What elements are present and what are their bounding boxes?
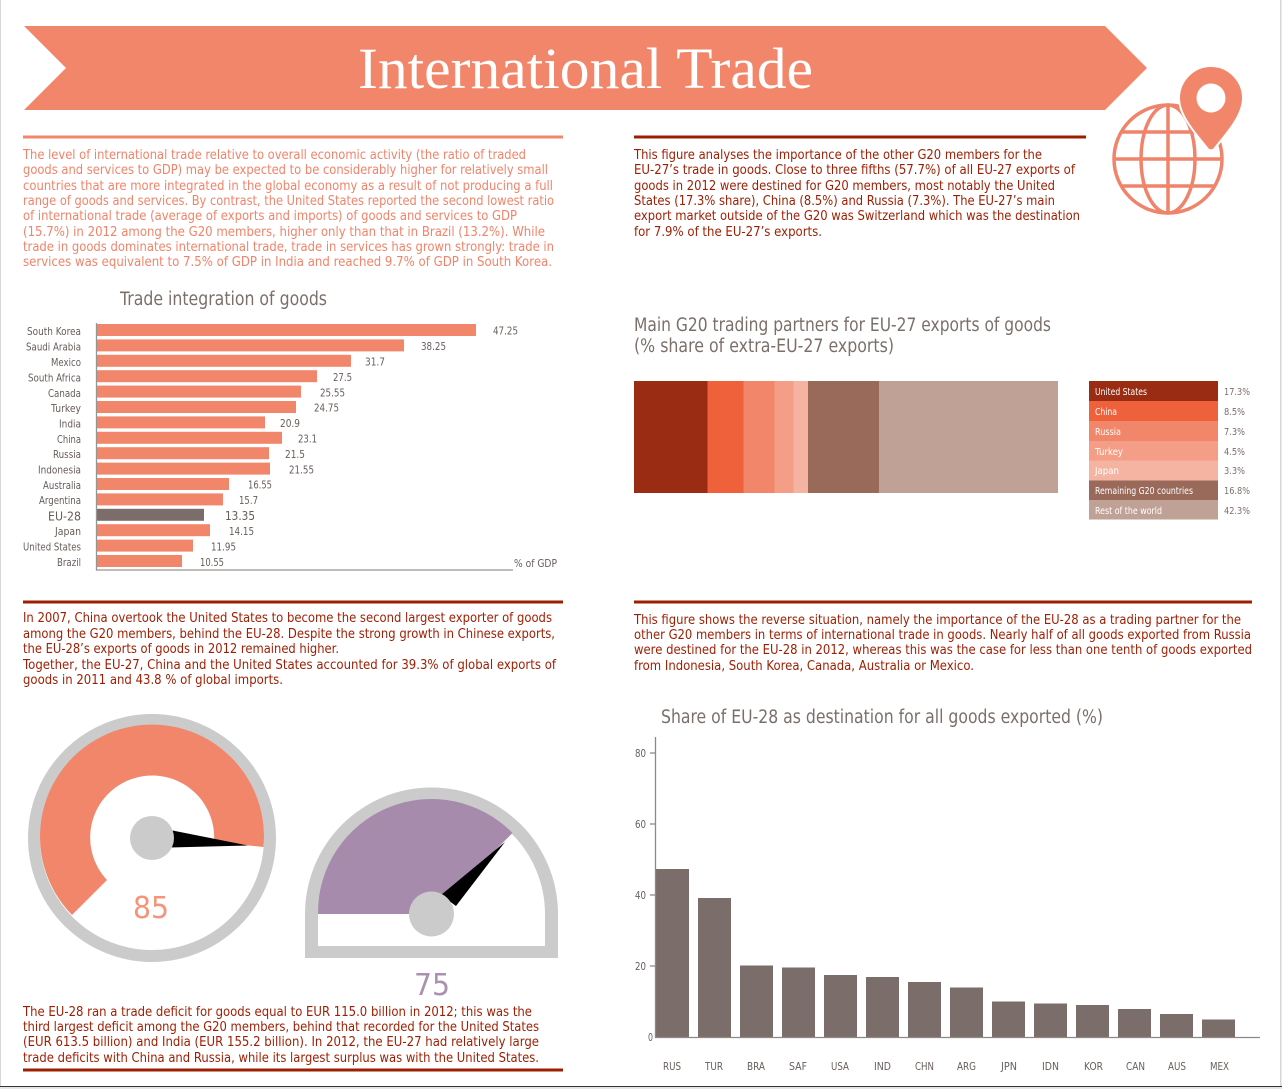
bar chart: trade integration of goods: 27.5 [333, 372, 352, 384]
text block: trade relative to economic activity: trade in goods dominates international trade, trade in services has grown strongly: trade in [23, 240, 554, 255]
text block: importance of G20 members: EU-27’s trade in goods. Close to three fifths (57.7%) of all EU-27 exports of [634, 163, 1075, 178]
legend: export shares: 17.3% [1224, 387, 1250, 398]
bar chart: trade integration of goods: 47.25 [493, 326, 518, 338]
bar chart: trade integration of goods: % of GDP [514, 558, 557, 570]
heading: main G20 trading partners: (% share of extra-EU-27 exports) [634, 336, 894, 357]
heading: main G20 trading partners [634, 315, 1051, 357]
gauge: 75 [305, 788, 558, 1003]
bar chart: trade integration of goods: Mexico [51, 357, 81, 369]
text block: importance of G20 members: for 7.9% of the EU-27’s exports. [634, 225, 822, 240]
legend: export shares: 16.8% [1224, 486, 1250, 497]
text block: trade relative to economic activity: (15.7%) in 2012 among the G20 members, higher only than that in Brazil (13.2%). While [23, 225, 545, 240]
bar chart: trade integration of goods: South Korea [27, 326, 81, 338]
text block: importance of G20 members: goods in 2012 were destined for G20 members, most notably the United [634, 179, 1055, 194]
text block: importance of G20 members: export market outside of the G20 was Switzerland which was the destination [634, 209, 1080, 224]
bar chart: share of EU-28 as destination: CAN [1126, 1061, 1145, 1073]
bar chart: share of EU-28 as destination: RUS [663, 1061, 681, 1073]
bar chart: share of EU-28 as destination: ARG [957, 1061, 976, 1073]
bar chart: share of EU-28 as destination: TUR [704, 1061, 723, 1073]
text block: trade relative to economic activity: The level of international trade relative to overall economic activity (the ratio of traded [22, 148, 526, 163]
text block: EU-28 trade deficit: (EUR 613.5 billion) and India (EUR 155.2 billion). In 2012, the EU-27 had relatively large [23, 1035, 539, 1050]
text block: China overtook the United States: the EU-28’s exports of goods in 2012 remained higher. [23, 642, 339, 657]
bar chart: trade integration of goods: Russia [53, 449, 81, 461]
legend: export shares: 7.3% [1224, 427, 1245, 438]
bar chart: trade integration of goods: 16.55 [248, 480, 272, 492]
bar chart: trade integration of goods: 11.95 [211, 542, 236, 554]
bar chart: trade integration of goods: Argentina [39, 495, 81, 507]
title banner [24, 26, 1147, 110]
legend: export shares: 4.5% [1224, 447, 1245, 458]
bar chart: share of EU-28 as destination: BRA [747, 1061, 766, 1073]
legend: export shares: Japan [1094, 466, 1119, 477]
bar chart: trade integration of goods: 24.75 [314, 402, 339, 414]
bar chart: trade integration of goods: Indonesia [38, 464, 81, 476]
text block: trade relative to economic activity: countries that are more integrated in the global economy as a result of not producing a full [23, 179, 553, 194]
legend: export shares: Turkey [1094, 447, 1123, 458]
bar chart: trade integration of goods: 14.15 [229, 526, 254, 538]
bar chart: share of EU-28 as destination [635, 737, 1260, 1073]
bar chart: share of EU-28 as destination: 20 [635, 961, 646, 973]
gauge: 85: 85 [133, 891, 169, 926]
bar chart: trade integration of goods [23, 323, 557, 570]
text block: trade relative to economic activity [22, 136, 563, 270]
bar chart: share of EU-28 as destination: JPN [1000, 1061, 1017, 1073]
bar chart: trade integration of goods: 10.55 [200, 557, 224, 569]
text block: EU-28 trade deficit: third largest deficit among the G20 members, behind that recorded for the United States [23, 1020, 539, 1035]
bar chart: share of EU-28 as destination: 40 [635, 890, 646, 902]
legend: export shares: Russia [1095, 427, 1121, 438]
bar chart: share of EU-28 as destination: USA [831, 1061, 850, 1073]
bar chart: share of EU-28 as destination: MEX [1210, 1061, 1229, 1073]
text block: China overtook the United States: In 2007, China overtook the United States to become the second largest exporter of goods [23, 611, 552, 626]
bar chart: trade integration of goods: 23.1 [298, 434, 317, 446]
legend: export shares: 8.5% [1224, 407, 1245, 418]
legend: export shares: Rest of the world [1095, 506, 1162, 517]
bar chart: share of EU-28 as destination: SAF [789, 1061, 807, 1073]
text block: importance of G20 members: States (17.3% share), China (8.5%) and Russia (7.3%). The EU-27’s main [634, 194, 1055, 209]
legend: export shares [1089, 381, 1250, 520]
bar chart: trade integration of goods: 21.55 [289, 464, 314, 476]
bar chart: trade integration of goods: 13.35 [225, 508, 255, 523]
bar chart: share of EU-28 as destination: 80 [635, 748, 646, 760]
bar chart: trade integration of goods: Australia [43, 480, 81, 492]
legend: export shares: 3.3% [1224, 466, 1245, 477]
text block: EU-28 trade deficit [22, 1005, 563, 1072]
text block: China overtook the United States: among the G20 members, behind the EU-28. Despite the strong growth in Chinese exports, [23, 627, 555, 642]
bar chart: trade integration of goods: India [59, 418, 81, 430]
text block: EU-28 as trading partner [633, 600, 1252, 674]
text block: EU-28 trade deficit: trade deficits with China and Russia, while its largest surplus was with the United States. [23, 1051, 539, 1066]
text block: trade relative to economic activity: goods and services to GDP) may be expected to be considerably higher for relatively small [23, 163, 548, 178]
text block: EU-28 trade deficit: The EU-28 ran a trade deficit for goods equal to EUR 115.0 billion in 2012; this was the [22, 1005, 532, 1020]
bar chart: trade integration of goods: China [57, 434, 81, 446]
text block: China overtook the United States [22, 600, 563, 688]
bar chart: trade integration of goods: 31.7 [365, 356, 385, 368]
text block: trade relative to economic activity: services was equivalent to 7.5% of GDP in India and reached 9.7% of GDP in South Korea. [23, 255, 552, 270]
text block: importance of G20 members: This figure analyses the importance of the other G20 members for the [633, 148, 1042, 163]
stacked bar: EU-27 export shares [634, 381, 1058, 493]
text block: China overtook the United States: goods in 2011 and 43.8 % of global imports. [23, 673, 283, 688]
bar chart: trade integration of goods: South Africa [28, 372, 81, 384]
icon: globe with location pin [1114, 66, 1243, 213]
bar chart: share of EU-28 as destination: AUS [1168, 1061, 1186, 1073]
bar chart: trade integration of goods: 20.9 [280, 418, 300, 430]
title banner: International Trade [358, 36, 813, 101]
bar chart: trade integration of goods: Japan [54, 526, 81, 538]
heading: main G20 trading partners: Main G20 trading partners for EU-27 exports of goods [634, 315, 1051, 336]
text block: trade relative to economic activity: range of goods and services. By contrast, the United States reported the second lowest ratio [23, 194, 554, 209]
heading: trade integration of goods: Trade integration of goods [119, 289, 327, 310]
bar chart: share of EU-28 as destination: 60 [635, 819, 646, 831]
bar chart: trade integration of goods: 15.7 [239, 495, 258, 507]
bar chart: share of EU-28 as destination: IND [874, 1061, 891, 1073]
bar chart: share of EU-28 as destination: IDN [1042, 1061, 1059, 1073]
gauge: 75: 75 [414, 968, 450, 1003]
legend: export shares: 42.3% [1224, 506, 1250, 517]
legend: export shares: China [1095, 407, 1117, 418]
text block: trade relative to economic activity: of international trade (average of exports and imports) of goods and services to GDP [23, 209, 517, 224]
bar chart: share of EU-28 as destination: CHN [915, 1061, 934, 1073]
heading: share of EU-28 as destination: Share of EU-28 as destination for all goods exported (%) [661, 707, 1103, 728]
bar chart: trade integration of goods: 25.55 [320, 388, 345, 400]
bar chart: share of EU-28 as destination: KOR [1084, 1061, 1103, 1073]
bar chart: trade integration of goods: EU-28 [48, 508, 81, 524]
gauge: 85 [34, 720, 270, 956]
text block: importance of G20 members [633, 136, 1086, 240]
bar chart: share of EU-28 as destination: 0 [648, 1032, 653, 1044]
bar chart: trade integration of goods: 21.5 [285, 449, 305, 461]
bar chart: trade integration of goods: Saudi Arabia [26, 342, 81, 354]
legend: export shares: United States [1095, 387, 1147, 398]
bar chart: trade integration of goods: Brazil [57, 557, 81, 569]
bar chart: trade integration of goods: Canada [48, 388, 81, 400]
text block: EU-28 as trading partner: from Indonesia, South Korea, Canada, Australia or Mexico. [634, 659, 974, 674]
bar chart: trade integration of goods: 38.25 [421, 341, 446, 353]
legend: export shares: Remaining G20 countries [1095, 486, 1193, 497]
bar chart: trade integration of goods: United States [23, 542, 81, 554]
bar chart: trade integration of goods: Turkey [50, 403, 81, 415]
text block: China overtook the United States: Together, the EU-27, China and the United States accounted for 39.3% of global exports of [22, 658, 556, 673]
